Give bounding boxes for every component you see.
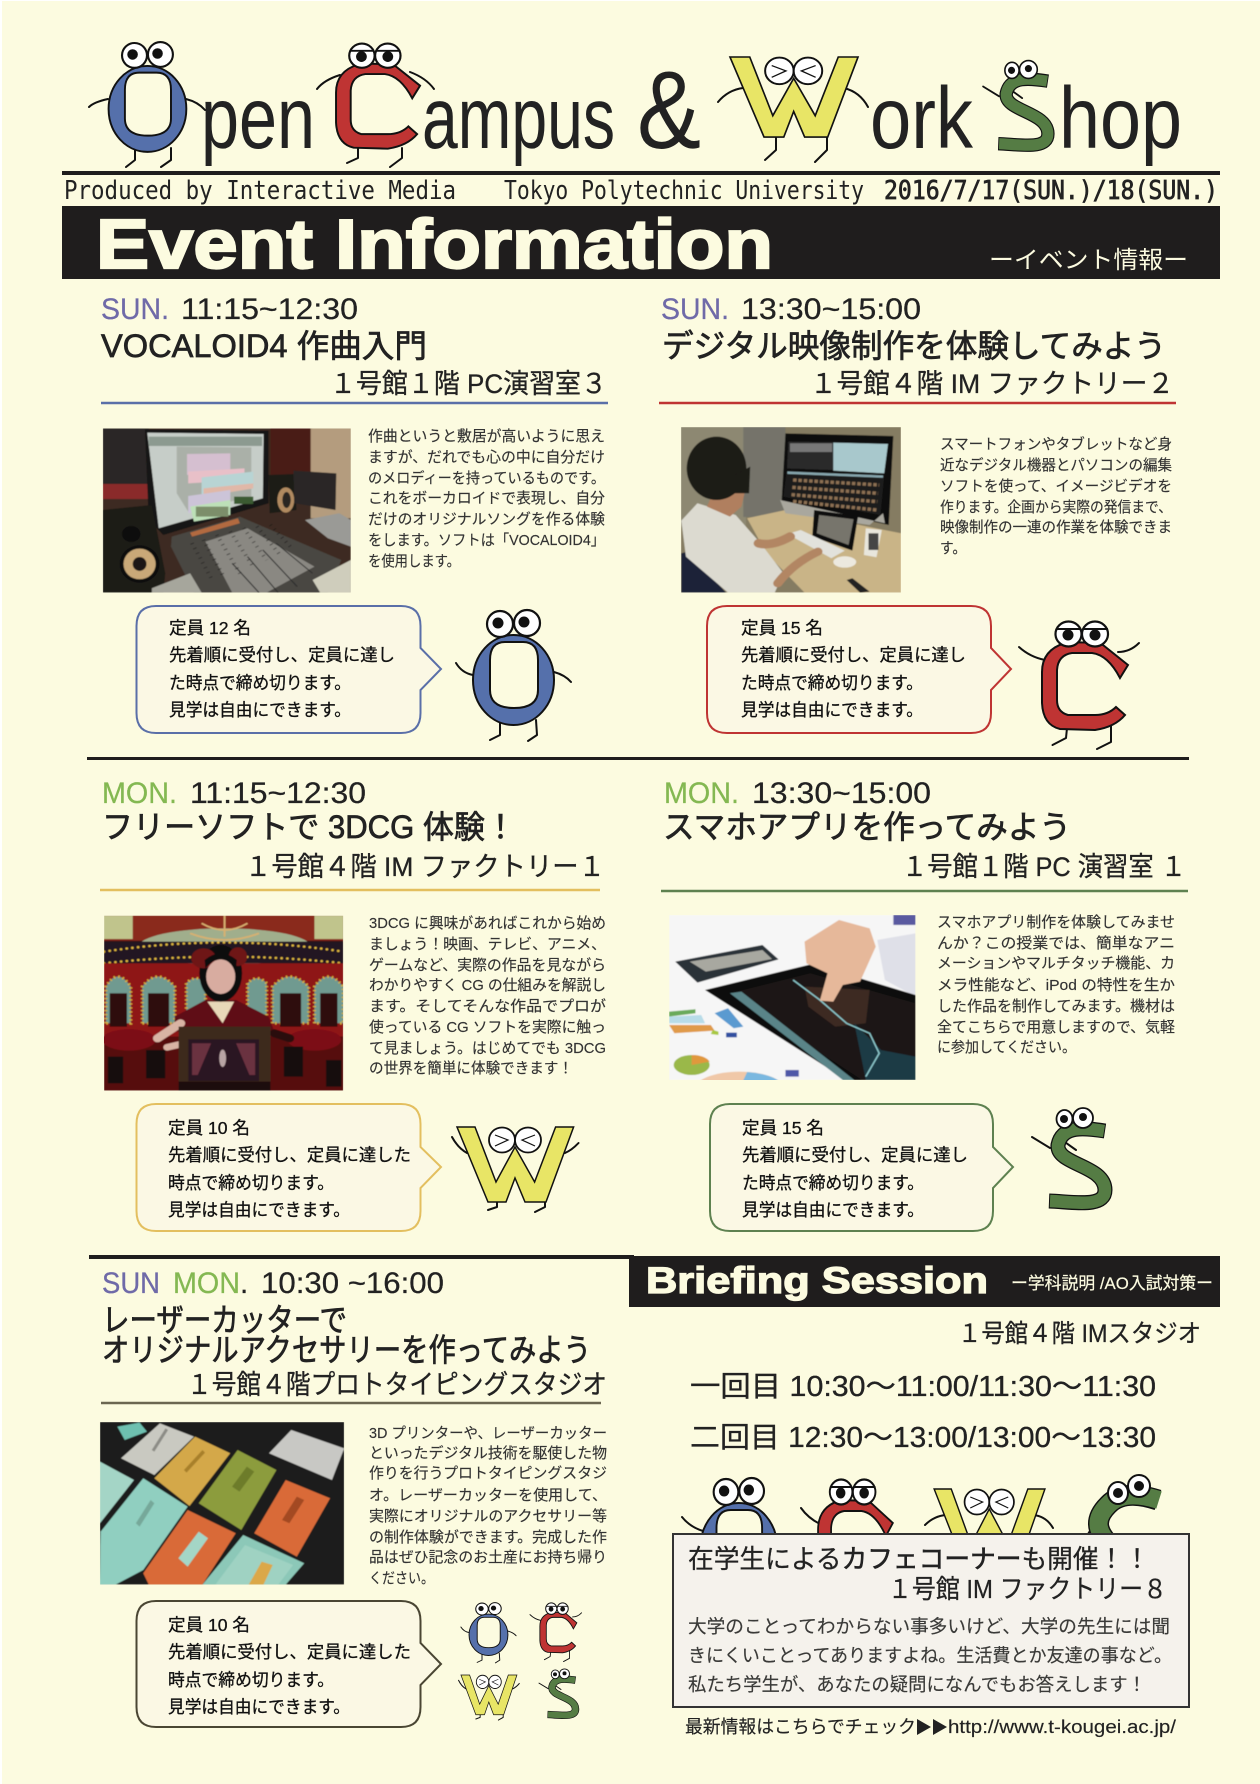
description: をします。ソフトは「VOCALOID4」 xyxy=(368,532,605,549)
description xyxy=(369,915,606,1077)
description: のメロディーを持っているものです。 xyxy=(368,469,605,487)
description: 3DCG に興味があればこれから始め xyxy=(369,915,606,932)
description: だけのオリジナルソングを作る体験 xyxy=(368,511,605,528)
callout: capacity: た時点で締め切ります。 xyxy=(742,1173,924,1193)
callout: capacity: た時点で締め切ります。 xyxy=(169,673,351,693)
producer and date line: Tokyo Polytechnic University xyxy=(504,176,864,206)
description: スマートフォンやタブレットなど身 xyxy=(940,435,1172,453)
description: これをボーカロイドで表現し、自分 xyxy=(368,490,605,507)
title letters xyxy=(201,49,1182,172)
callout: capacity: 時点で締め切ります。 xyxy=(168,1670,334,1690)
callout: capacity: 見学は自由にできます。 xyxy=(168,1200,350,1220)
room: １号館４階プロトタイピングスタジオ xyxy=(187,1370,607,1400)
panel: VOCALOID4 xyxy=(101,293,608,741)
website note: http://www.t-kougei.ac.jp/ xyxy=(948,1717,1176,1737)
icon: mascot O xyxy=(456,610,571,741)
description: ください。 xyxy=(369,1570,434,1587)
time heading: SUN. xyxy=(101,293,169,326)
heading band: Briefing Session: Briefing Session xyxy=(646,1260,988,1301)
time heading: SUN. xyxy=(661,293,729,326)
session title: VOCALOID4 作曲入門 xyxy=(101,328,427,364)
icon: mascot S xyxy=(983,61,1048,145)
icon: mascot C xyxy=(1019,622,1139,749)
callout: capacity: 時点で締め切ります。 xyxy=(168,1173,334,1193)
description xyxy=(368,427,605,570)
description: 映像制作の一連の作業を体験できま xyxy=(940,519,1172,536)
callout: capacity: 定員 15 名 xyxy=(741,618,823,638)
callout: capacity xyxy=(136,1104,441,1231)
description: メラ性能など、iPod の特性を生か xyxy=(937,977,1175,994)
callout: capacity xyxy=(136,606,441,733)
callout: capacity: た時点で締め切ります。 xyxy=(741,673,923,693)
photo: CG character in red theatre xyxy=(102,916,343,1091)
panel: briefing session xyxy=(629,1256,1220,1737)
callout: capacity: 定員 10 名 xyxy=(168,1118,250,1138)
title letters: hop xyxy=(1059,70,1182,167)
title letters: & xyxy=(637,49,701,172)
callout: capacity: 先着順に受付し、定員に達し xyxy=(742,1145,968,1165)
producer and date line: Produced by Interactive Media xyxy=(64,176,456,206)
session title: レーザーカッターで xyxy=(102,1302,347,1338)
description: 使っている CG ソフトを実際に触っ xyxy=(369,1019,606,1036)
panel: cafe corner: きにくいことってありますよね。生活費とか友達の事など。 xyxy=(688,1645,1172,1666)
session title: フリーソフトで 3DCG 体験！ xyxy=(102,809,516,845)
photo: student editing video xyxy=(681,427,901,593)
producer and date line: 2016/7/17(SUN.)/18(SUN.) xyxy=(884,176,1218,206)
panel: cafe corner: １号館 IM ファクトリー８ xyxy=(888,1574,1167,1604)
description: んか？この授業では、簡単なアニ xyxy=(937,935,1175,952)
callout: capacity: 先着順に受付し、定員に達した xyxy=(168,1145,411,1165)
description: 作ります。企画から実際の発信まで、 xyxy=(940,499,1172,516)
callout: capacity: 先着順に受付し、定員に達した xyxy=(168,1642,411,1662)
description: 作りを行うプロトタイピングスタジ xyxy=(369,1465,607,1482)
panel: cafe corner: 大学のことってわからない事多いけど、大学の先生には聞 xyxy=(688,1616,1170,1637)
callout: capacity xyxy=(710,1104,1013,1231)
time heading: 13:30~15:00 xyxy=(741,293,921,326)
time heading: MON. xyxy=(102,777,177,810)
session title xyxy=(102,1302,591,1368)
description: ます。そしてそんな作品でプロが xyxy=(369,998,606,1015)
time heading: SUN xyxy=(102,1267,160,1300)
icon: mascot C xyxy=(317,44,434,167)
icon: mascot S xyxy=(1032,1108,1105,1203)
title: Open Campus & Work Shop xyxy=(89,42,1182,172)
description: ましょう！映画、テレビ、アニメ、 xyxy=(369,936,606,953)
callout: capacity: 見学は自由にできます。 xyxy=(742,1200,924,1220)
time heading: 11:15~12:30 xyxy=(190,777,366,810)
heading band: Event Information: Event Information xyxy=(96,205,773,283)
panel: cafe corner: 在学生によるカフェコーナーも開催！！ xyxy=(688,1544,1150,1574)
description: メーションやマルチタッチ機能、カ xyxy=(937,955,1175,972)
time heading xyxy=(664,777,931,810)
session times: 二回目 12:30〜13:00/13:00〜13:30 xyxy=(690,1422,1156,1454)
description: て見ましょう。はじめてでも 3DCG xyxy=(369,1040,606,1057)
icon: mascot O xyxy=(89,42,205,167)
time heading: 13:30~15:00 xyxy=(752,777,931,810)
heading band: Briefing Session: ー学科説明 /AO入試対策ー xyxy=(1011,1274,1213,1293)
callout: capacity: 見学は自由にできます。 xyxy=(741,700,923,720)
description: 近なデジタル機器とパソコンの編集 xyxy=(940,456,1172,474)
description: した作品を制作してみます。機材は xyxy=(937,998,1175,1015)
description: ますが、だれでも心の中に自分だけ xyxy=(368,449,605,466)
description: オ。レーザーカッターを使用して、 xyxy=(369,1487,607,1504)
session times: 一回目 10:30〜11:00/11:30〜11:30 xyxy=(690,1371,1156,1403)
time heading: 10:30 ~16:00 xyxy=(261,1267,444,1300)
photo: finger on tablet xyxy=(669,915,916,1080)
panel: free software 3DCG xyxy=(100,777,606,1231)
room: １号館４階 IMスタジオ xyxy=(958,1320,1201,1348)
session title: スマホアプリを作ってみよう xyxy=(663,809,1071,845)
time heading: MON. xyxy=(664,777,739,810)
description xyxy=(940,435,1172,557)
callout: capacity xyxy=(136,1601,441,1727)
callout: capacity: 定員 10 名 xyxy=(168,1615,250,1635)
time heading: . xyxy=(240,1267,248,1300)
description xyxy=(937,914,1175,1056)
description: 3D プリンターや、レーザーカッター xyxy=(369,1425,607,1442)
time heading xyxy=(101,293,358,326)
callout: capacity: 先着順に受付し、定員に達し xyxy=(169,645,395,665)
callout: capacity: 見学は自由にできます。 xyxy=(169,700,351,720)
callout: capacity: 定員 12 名 xyxy=(169,618,251,638)
description: スマホアプリ制作を体験してみませ xyxy=(937,914,1175,931)
photo: laser-cut card cases xyxy=(100,1422,344,1585)
icon: four small mascots xyxy=(459,1603,582,1720)
description: 作曲というと敷居が高いように思え xyxy=(368,427,605,445)
description: す。 xyxy=(940,540,966,557)
description: を使用します。 xyxy=(368,553,460,570)
description: の世界を簡単に体験できます！ xyxy=(369,1060,573,1077)
panel: laser cutter xyxy=(100,1267,607,1727)
panel: smartphone app xyxy=(661,777,1188,1231)
room: １号館４階 IM ファクトリー２ xyxy=(810,369,1174,399)
heading band: Briefing Session xyxy=(629,1256,1220,1307)
description: に参加してください。 xyxy=(937,1039,1076,1056)
title letters: ampus xyxy=(422,70,615,167)
heading band: Event Information xyxy=(62,205,1220,283)
description: の制作体験ができます。完成した作 xyxy=(369,1529,607,1546)
time heading xyxy=(661,293,921,326)
icon: mascots peeking over cafe box xyxy=(682,1475,1159,1593)
description: 全てこちらで用意しますので、気軽 xyxy=(937,1019,1175,1036)
header rule xyxy=(62,171,1220,175)
description: といったデジタル技術を駆使した物 xyxy=(369,1444,607,1462)
description: 品はぜひ記念のお土産にお持ち帰り xyxy=(369,1548,607,1566)
website note xyxy=(685,1717,1176,1737)
panel: cafe corner: 私たち学生が、あなたの疑問になんでもお答えします！ xyxy=(688,1674,1146,1695)
website note: 最新情報はこちらでチェック xyxy=(685,1717,916,1737)
description: わかりやすく CG の仕組みを解説し xyxy=(369,977,606,994)
session title: デジタル映像制作を体験してみよう xyxy=(662,328,1166,364)
icon: mascot W xyxy=(452,1127,578,1212)
description: 実際にオリジナルのアクセサリー等 xyxy=(369,1507,607,1525)
panel: digital video xyxy=(659,293,1176,749)
time heading xyxy=(102,777,366,810)
session times xyxy=(690,1371,1156,1454)
time heading: 11:15~12:30 xyxy=(181,293,358,326)
callout: capacity: 定員 15 名 xyxy=(742,1118,824,1138)
heading band: Event Information: ーイベント情報ー xyxy=(989,247,1188,274)
callout: capacity xyxy=(707,606,1011,733)
description xyxy=(369,1425,607,1587)
time heading: MON xyxy=(173,1267,240,1300)
room: １号館１階 PC 演習室 １ xyxy=(902,852,1186,882)
producer and date line xyxy=(64,176,1218,206)
description: ゲームなど、実際の作品を見ながら xyxy=(369,957,606,974)
session title: オリジナルアクセサリーを作ってみよう xyxy=(102,1332,591,1368)
title letters: pen xyxy=(201,70,315,167)
time heading xyxy=(102,1267,444,1300)
callout: capacity: 先着順に受付し、定員に達し xyxy=(741,645,966,665)
icon: mascot W xyxy=(718,57,868,162)
title letters: ork xyxy=(870,70,973,167)
description: ソフトを使って、イメージビデオを xyxy=(940,477,1172,495)
room: １号館１階 PC演習室３ xyxy=(330,369,607,399)
room: １号館４階 IM ファクトリー１ xyxy=(245,852,605,882)
photo: studio mixer and monitor xyxy=(103,428,351,593)
panel: cafe corner xyxy=(673,1534,1189,1707)
callout: capacity: 見学は自由にできます。 xyxy=(168,1697,350,1717)
